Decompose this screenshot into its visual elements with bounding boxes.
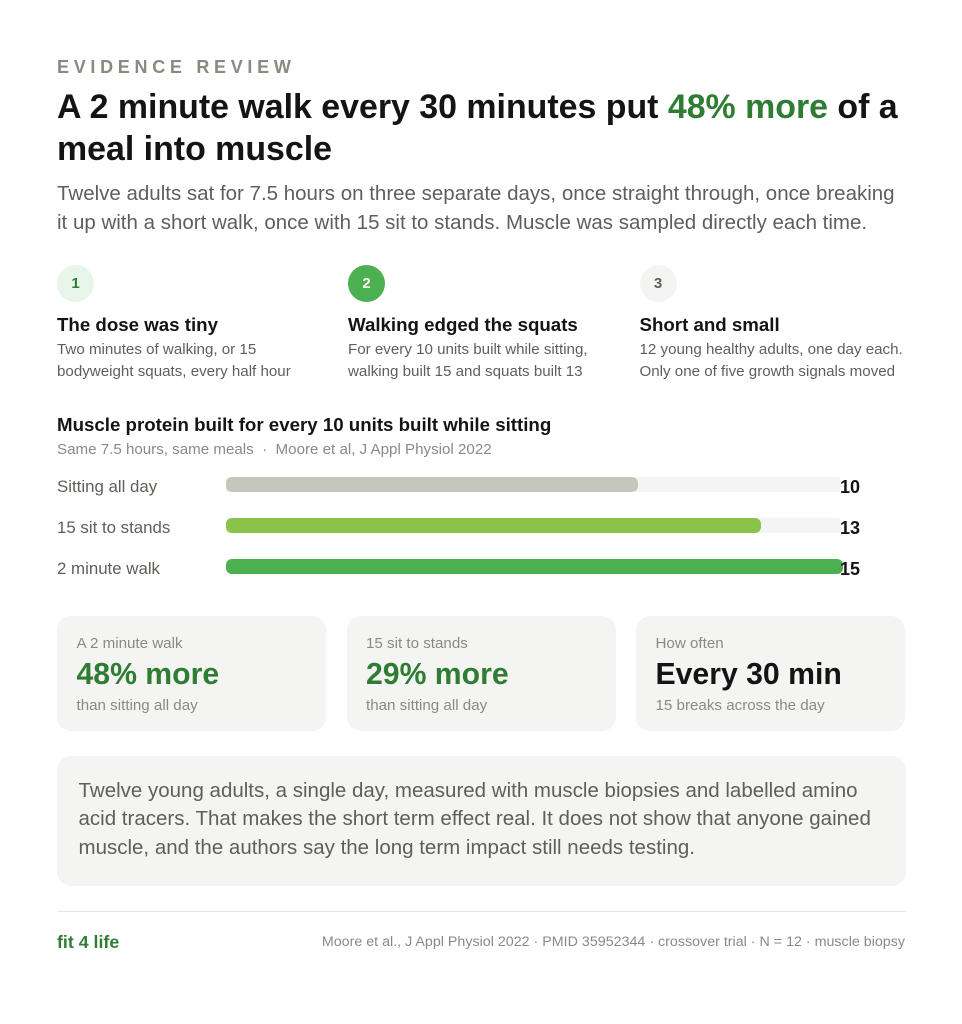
badge 2: 2 <box>362 275 371 292</box>
bar: 2 minute walk <box>57 559 860 579</box>
bar: sitting all day: 10 <box>840 477 860 497</box>
callout text: muscle, and the authors say the long term impact still needs testing. <box>78 836 695 858</box>
stat card: walk: 48% more <box>76 658 219 691</box>
callout text <box>78 778 871 858</box>
stat card: frequency: 15 breaks across the day <box>656 697 825 714</box>
subtitle: Twelve adults sat for 7.5 hours on three separate days, once straight through, once breaking <box>57 182 895 205</box>
stat card: sit to stands: 29% more <box>366 658 509 691</box>
stat card: frequency: How often <box>656 635 724 652</box>
subtitle <box>57 182 895 234</box>
takeaway 3 text: Only one of five growth signals moved <box>640 362 895 380</box>
stat card: sit to stands: 15 sit to stands <box>366 635 468 652</box>
stat card: walk <box>57 616 326 731</box>
takeaway 2 text <box>348 341 588 380</box>
stat card: frequency: Every 30 min <box>656 658 842 691</box>
footer brand: fit 4 life <box>57 932 119 952</box>
badge 1: 1 <box>71 275 80 292</box>
bar: 2 minute walk: 2 minute walk <box>57 559 160 578</box>
bar chart <box>57 477 860 579</box>
takeaway 2 text: For every 10 units built while sitting, <box>348 341 588 358</box>
badge 3: 3 <box>654 275 662 292</box>
callout text: acid tracers. That makes the short term effect real. It does not show that anyone gained <box>78 807 871 830</box>
bar: 15 sit to stands <box>57 518 860 538</box>
eyebrow: EVIDENCE REVIEW <box>57 57 296 77</box>
takeaway 1 text: Two minutes of walking, or 15 <box>57 341 256 358</box>
bar: 2 minute walk: 15 <box>840 559 860 579</box>
badge 3 <box>640 265 676 302</box>
panel: takeaway 2 <box>348 265 588 380</box>
title: A 2 minute walk every 30 minutes put 48% more of a <box>57 88 898 126</box>
footer source: Moore et al., J Appl Physiol 2022 · PMID 35952344 · crossover trial · N = 12 · muscle biopsy <box>322 934 905 950</box>
title: meal into muscle <box>57 130 332 168</box>
stat card: sit to stands: than sitting all day <box>366 697 487 714</box>
takeaway 1 text: bodyweight squats, every half hour <box>57 362 291 380</box>
chart subheading: Same 7.5 hours, same meals · Moore et al, J Appl Physiol 2022 <box>57 441 492 458</box>
takeaway 3 text <box>640 341 903 380</box>
bar: 15 sit to stands: 15 sit to stands <box>57 518 170 537</box>
stat card: sit to stands <box>346 616 616 731</box>
subtitle: it up with a short walk, once with 15 sit to stands. Muscle was sampled directly each time. <box>57 210 867 234</box>
callout <box>57 756 906 886</box>
takeaway 1 heading: The dose was tiny <box>57 314 218 335</box>
takeaway 2 heading: Walking edged the squats <box>348 314 578 335</box>
panel: takeaway 3 <box>640 265 903 380</box>
badge 1 <box>57 265 94 302</box>
takeaway 3 text: 12 young healthy adults, one day each. <box>640 341 903 358</box>
takeaway 3 heading: Short and small <box>640 314 780 335</box>
bar: sitting all day <box>57 477 860 497</box>
badge 2 <box>348 265 385 302</box>
bar: sitting all day: Sitting all day <box>57 477 157 496</box>
stat card: walk: than sitting all day <box>76 697 198 714</box>
callout text: Twelve young adults, a single day, measured with muscle biopsies and labelled amino <box>78 778 858 802</box>
panel: takeaway 1 <box>57 265 291 380</box>
bar: 15 sit to stands: 13 <box>840 518 860 538</box>
takeaway 1 text <box>57 341 291 380</box>
chart heading: Muscle protein built for every 10 units built while sitting <box>57 414 551 435</box>
stat card: walk: A 2 minute walk <box>76 635 183 652</box>
stat card: frequency <box>636 616 905 731</box>
takeaway 2 text: walking built 15 and squats built 13 <box>348 362 583 380</box>
title <box>57 88 898 168</box>
